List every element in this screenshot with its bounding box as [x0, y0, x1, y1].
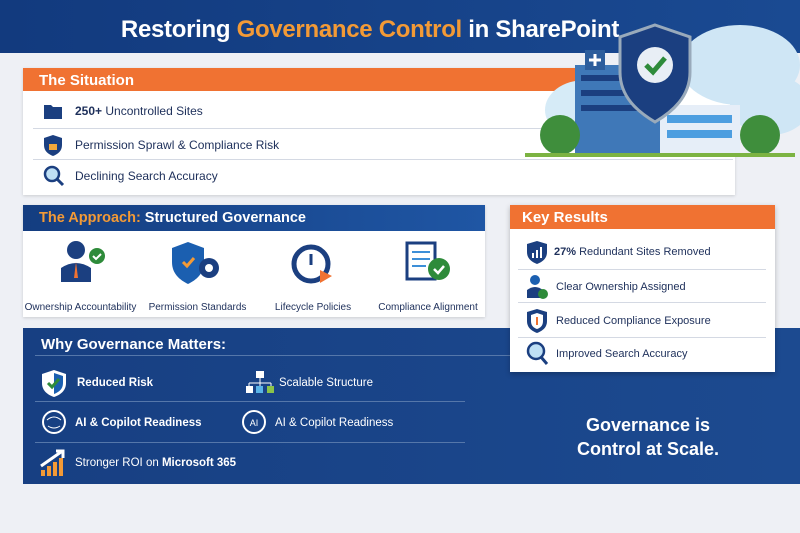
tagline: Governance is — [586, 415, 710, 435]
situation heading — [23, 68, 583, 91]
result: compliance exposure: Reduced Compliance Exposure — [556, 315, 711, 327]
item: stronger roi: Stronger ROI on Microsoft 365 — [75, 457, 236, 469]
item: ai readiness bold: AI & Copilot Readiness — [75, 417, 202, 429]
header band — [0, 0, 800, 53]
item: permission sprawl: Permission Sprawl & Compliance Risk — [75, 138, 279, 152]
panel: key results — [510, 205, 775, 372]
item: permission standards: Permission Standards — [149, 302, 246, 313]
approach heading: The Approach: Structured Governance — [39, 210, 306, 226]
why heading: Why Governance Matters: — [41, 336, 226, 353]
item: lifecycle policies — [275, 244, 351, 313]
panel: situation — [23, 68, 735, 195]
result: compliance exposure — [527, 309, 711, 333]
result: search accuracy: Improved Search Accuracy — [556, 348, 687, 360]
panel: approach — [23, 205, 485, 317]
item: scalable structure — [246, 371, 373, 393]
item: ai readiness — [242, 410, 393, 434]
item: uncontrolled sites: 250+ Uncontrolled Sites — [75, 104, 203, 118]
approach heading — [23, 205, 485, 231]
item: ai readiness bold — [42, 410, 202, 434]
key results heading: Key Results — [522, 209, 608, 226]
tagline — [577, 415, 719, 459]
result: redundant sites — [527, 241, 711, 264]
result: clear ownership — [527, 275, 686, 299]
item: search accuracy: Declining Search Accuracy — [75, 169, 218, 183]
result: search accuracy — [526, 342, 688, 365]
item: ownership accountability: Ownership Accountability — [25, 302, 136, 313]
item: reduced risk: Reduced Risk — [77, 377, 153, 389]
item: permission standards — [149, 242, 246, 313]
item: ai readiness: AI & Copilot Readiness — [275, 417, 393, 429]
item: ownership accountability — [25, 241, 136, 313]
result: clear ownership: Clear Ownership Assigned — [556, 281, 686, 293]
item: compliance alignment — [378, 242, 478, 313]
situation heading: The Situation — [39, 72, 134, 89]
panel: why governance matters — [23, 328, 800, 484]
result: redundant sites: 27% Redundant Sites Removed — [554, 246, 711, 258]
item: search accuracy — [44, 166, 218, 186]
item: permission sprawl — [44, 135, 280, 156]
title: Restoring Governance Control in SharePoint — [121, 16, 619, 43]
item: reduced risk — [42, 370, 153, 397]
illustration: building with shield — [525, 23, 800, 157]
item: ai readiness: AI — [250, 418, 258, 428]
item: compliance alignment: Compliance Alignment — [378, 302, 478, 313]
item: scalable structure: Scalable Structure — [279, 377, 373, 389]
key results heading — [510, 205, 775, 229]
tagline: Control at Scale. — [577, 439, 719, 459]
item: lifecycle policies: Lifecycle Policies — [275, 302, 351, 313]
item: stronger roi — [40, 450, 236, 476]
